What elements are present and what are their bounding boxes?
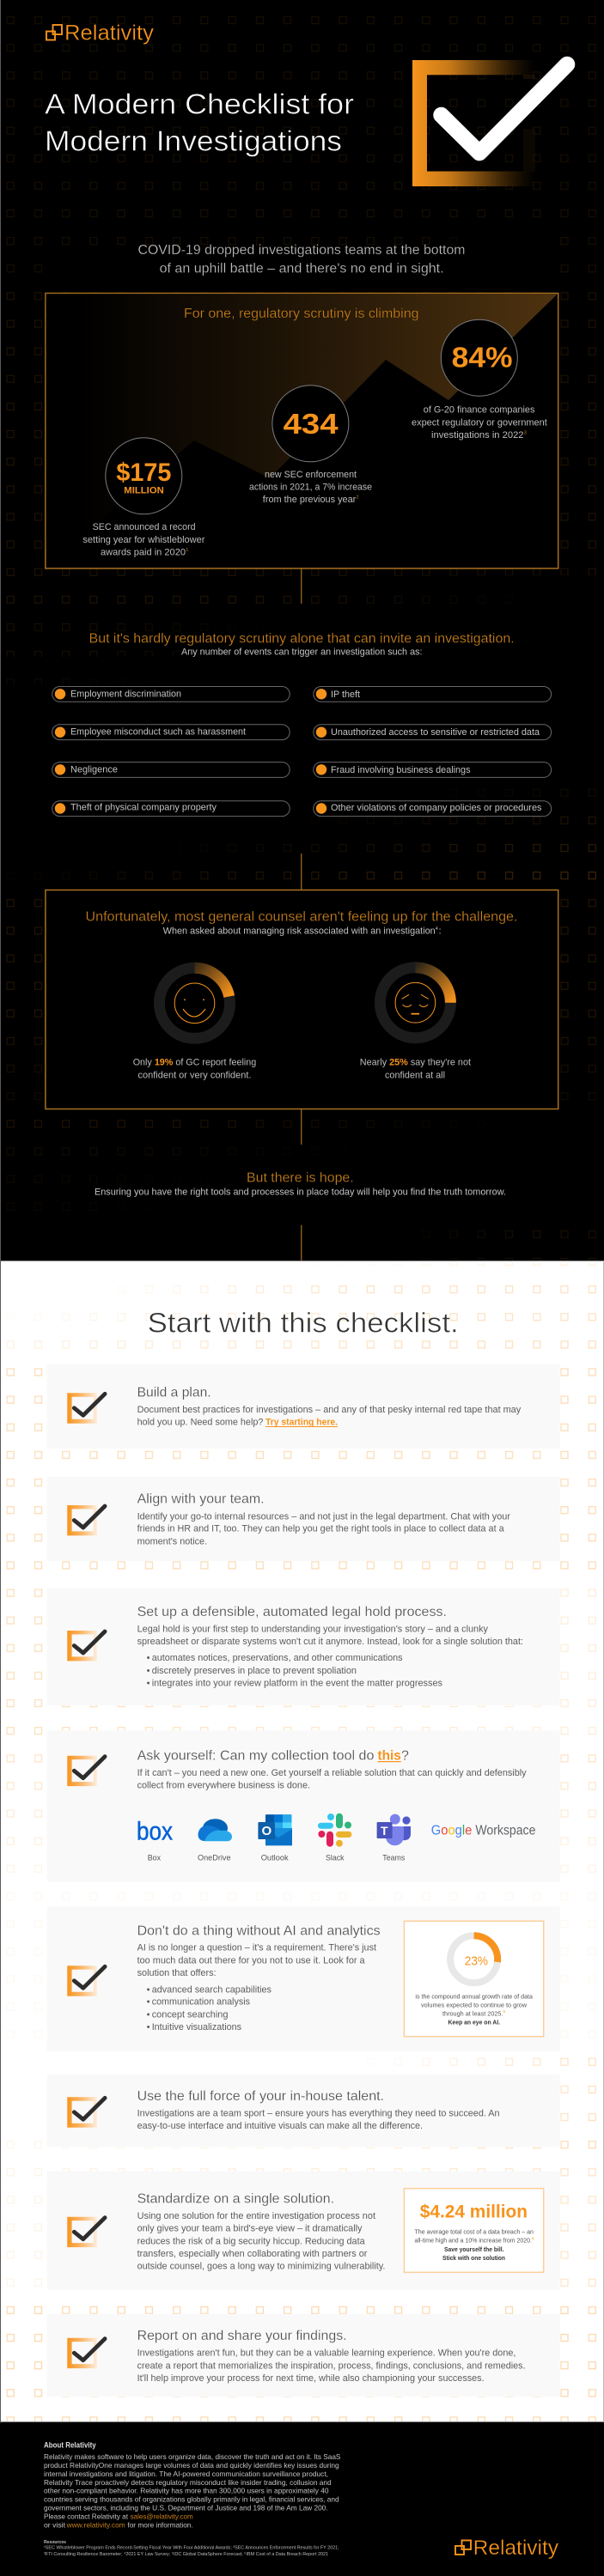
bullet list: •	[147, 1997, 150, 2008]
pill: fraud	[314, 762, 552, 777]
card: single solution	[47, 2172, 560, 2290]
intro text: of an uphill battle – and there's no end in sight.	[160, 261, 444, 276]
text: only 19 percent: Only 19% of GC report feeling	[133, 1058, 256, 1068]
card: AI and analytics: AI is no longer a question – it's a requirement. There's just	[137, 1943, 377, 1953]
card: report and share: create a report that memorializes the inspiration, process, findings, conclusions, and remedies.	[137, 2360, 526, 2371]
icon: large checkbox with check mark	[412, 60, 567, 186]
callout: 23 percent growth: through at least 2025.	[442, 2011, 503, 2017]
text: only 19 percent	[133, 1058, 256, 1080]
heading: general counsel	[86, 909, 517, 936]
stat: 175 million: $175	[116, 459, 171, 487]
bullet list: communication analysis	[152, 1997, 250, 2008]
footer: resources: Resources	[44, 2540, 66, 2545]
footer: resources: ³FTI Consulting Resilience Barometer; ⁴2021 EY Law Survey; ⁵IDC Global DataSphere Forecast; ⁶IBM Cost of a Data Breach Report 2021	[44, 2552, 328, 2557]
card: build a plan	[47, 1364, 560, 1449]
logo: Relativity footer: Relativity	[473, 2537, 558, 2560]
stat: 84 percent: of G-20 finance companies	[424, 405, 535, 416]
icon: check	[67, 1631, 105, 1661]
chart: 19 percent donut with smiling face	[160, 968, 230, 1038]
card: collection tool: If it can't – you need a new one. Get yourself a reliable solution that can quickly and defensibly	[137, 1768, 527, 1778]
card: align with your team: moment's notice.	[137, 1536, 207, 1546]
stat: 175 million: awards paid in 2020	[101, 548, 186, 558]
card: align with your team: friends in HR and IT, too. They can help you get the right tools in place to collect data at a	[137, 1524, 504, 1534]
pill: employee misconduct	[52, 725, 290, 740]
pill: employee misconduct: Employee misconduct such as harassment	[70, 727, 246, 738]
pill: IP theft	[314, 687, 552, 702]
card: align with your team: Identify your go-to internal resources – and not just in the legal department. Chat with your	[137, 1511, 510, 1522]
stat: 434: new SEC enforcement	[265, 470, 357, 480]
card: AI and analytics: too much data out there for you not to use it. Look for a	[137, 1955, 365, 1965]
footer background	[0, 2423, 604, 2576]
pill: fraud: Fraud involving business dealings	[331, 765, 471, 775]
heading: hope: Ensuring you have the right tools and processes in place today will help you find the truth tomorrow.	[95, 1188, 506, 1198]
logo: Outlook	[258, 1814, 292, 1862]
card: report and share: Investigations aren't fun, but they can be a valuable learning experience. When you're done,	[137, 2348, 516, 2359]
connector line	[301, 568, 302, 604]
card: AI and analytics	[47, 1906, 560, 2051]
footer: about Relativity: government sectors, including the U.S. Department of Justice and 198 of the Am Law 200.	[44, 2503, 328, 2512]
card: AI and analytics: Don't do a thing without AI and analytics	[137, 1923, 381, 1938]
footer: about Relativity: Relativity Trace proactively detects regulatory misconduct like insider trading, collusion and	[44, 2478, 332, 2487]
footer: about Relativity: countries serving thousands of organizations globally primarily in legal, financial services, and	[44, 2495, 339, 2504]
footer: about Relativity: sales@relativity.com	[131, 2512, 193, 2520]
bullet list: •	[147, 1666, 150, 1676]
icon: check	[67, 1393, 105, 1424]
bullet list	[147, 1984, 271, 2032]
footer: resources: ¹SEC Whistleblower Program Ends Record-Setting Fiscal Year With Four Additional Awards; ²SEC Announces Enforcement Results for FY 2021;	[44, 2546, 339, 2551]
chart: 23 percent donut: 23%	[465, 1953, 488, 1968]
pill: employment discrimination: Employment discrimination	[70, 690, 181, 700]
text: only 19 percent: confident or very confident.	[137, 1070, 251, 1080]
heading: general counsel: Unfortunately, most general counsel aren't feeling up for the challenge.	[86, 909, 517, 924]
callout: 4.24 million: 6	[532, 2236, 534, 2240]
heading: triggers: Any number of events can trigger an investigation such as:	[181, 647, 423, 657]
pill: negligence: Negligence	[70, 764, 118, 775]
intro text: COVID-19 dropped investigations teams at the bottom	[137, 243, 466, 258]
icon: check	[67, 1965, 105, 1996]
title: A Modern Checklist for	[45, 89, 354, 121]
pill: unauthorized access	[314, 725, 552, 740]
pill: theft of physical property	[52, 801, 290, 817]
card: collection tool: Ask yourself: Can my collection tool do	[137, 1748, 374, 1763]
icon: check	[67, 2097, 105, 2128]
icon: check	[67, 1756, 105, 1786]
logo: Box	[137, 1817, 173, 1862]
bullet list: •	[147, 2009, 150, 2020]
callout: 23 percent growth: is the compound annual growth rate of data	[415, 1994, 533, 2000]
text: nearly 25 percent: Nearly 25% say they're not	[360, 1058, 471, 1068]
logo: Slack: Slack	[326, 1854, 345, 1862]
pill: employment discrimination	[52, 687, 290, 702]
callout: 23 percent growth: 5	[503, 2009, 505, 2014]
pill: negligence	[52, 762, 290, 777]
panel: regulatory scrutiny climbing	[46, 294, 558, 568]
bullet list: •	[147, 2022, 150, 2032]
pill: IP theft: IP theft	[331, 690, 360, 700]
callout: 4.24 million: The average total cost of a data breach – an	[414, 2228, 534, 2236]
logo: Google Workspace	[431, 1824, 535, 1838]
card: single solution: only gives your team a bird's-eye view – it dramatically	[137, 2224, 363, 2234]
bullet list: •	[147, 1984, 150, 1995]
heading: hope: But there is hope.	[247, 1171, 354, 1186]
heading: general counsel: When asked about managing risk associated with an investigation	[163, 926, 436, 936]
logo: OneDrive: OneDrive	[198, 1854, 231, 1862]
card: legal hold process	[47, 1588, 560, 1705]
connector line	[301, 1109, 302, 1145]
bullet list: •	[147, 1653, 150, 1663]
text: nearly 25 percent	[360, 1058, 471, 1080]
bullet list: automates notices, preservations, and other communications	[152, 1653, 403, 1663]
callout: 4.24 million: Save yourself the bill.	[444, 2245, 503, 2253]
card: single solution: outside counsel, goes a long way to minimizing vulnerability.	[137, 2262, 385, 2272]
footer: about Relativity: www.relativity.com	[66, 2520, 125, 2529]
icon: check	[67, 2338, 105, 2368]
chart: 23 percent donut	[450, 1935, 497, 1983]
footer: about Relativity: for more information.	[127, 2520, 193, 2529]
footer: about Relativity: or visit	[44, 2520, 66, 2529]
stat: 175 million: MILLION	[124, 485, 164, 495]
heading: regulatory scrutiny: For one, regulatory scrutiny is climbing	[184, 307, 419, 321]
stat: 434: 2	[356, 495, 359, 500]
card: build a plan: Document best practices for investigations – and any of that pesky internal red tape that may	[137, 1405, 522, 1415]
logo: Google Workspace: Workspace	[475, 1824, 535, 1838]
footer: about Relativity: product RelativityOne manages large volumes of data and quickly identifies key issues during	[44, 2461, 339, 2470]
stat: 84 percent: investigations in 2022	[431, 430, 524, 440]
bullet list: advanced search capabilities	[152, 1984, 271, 1995]
card: in-house talent: Investigations are a team sport – ensure yours has everything they need to succeed. An	[137, 2109, 500, 2119]
stat: 84 percent	[412, 319, 547, 440]
bullet list: concept searching	[152, 2009, 229, 2020]
footer: about Relativity: Relativity makes software to help users organize data, discover the truth and act on it. Its SaaS	[44, 2452, 341, 2461]
card: build a plan: hold you up. Need some help?	[137, 1418, 263, 1428]
heading: general counsel: :	[438, 926, 442, 936]
stat: 175 million	[82, 438, 205, 558]
footer: about Relativity: internal investigations and litigation. The AI-powered communication surveillance product,	[44, 2470, 328, 2478]
chart: 25 percent donut with sad face	[380, 968, 450, 1038]
card: collection tool	[47, 1730, 560, 1882]
stat: 84 percent: 3	[524, 431, 527, 436]
heading: triggers	[89, 631, 515, 657]
link: this: this	[378, 1748, 401, 1763]
stat: 434: 434	[284, 408, 339, 440]
stat: 84 percent: 84%	[452, 342, 513, 374]
heading: triggers: But it's hardly regulatory scrutiny alone that can invite an investigation.	[89, 631, 515, 646]
logo: Google Workspace: Google	[431, 1824, 472, 1838]
stat: 175 million: SEC announced a record	[93, 522, 196, 532]
footer: about Relativity	[44, 2441, 341, 2529]
icon: check	[67, 2217, 105, 2247]
callout: 4.24 million: $4.24 million	[420, 2202, 528, 2222]
footer: about Relativity: About Relativity	[44, 2441, 96, 2450]
title	[45, 89, 354, 158]
logo: Relativity header: Relativity	[64, 21, 155, 46]
bullet list: Intuitive visualizations	[152, 2022, 241, 2032]
stat: 434: from the previous year	[263, 495, 357, 505]
stat: 434: actions in 2021, a 7% increase	[249, 483, 372, 493]
pill: other violations: Other violations of company policies or procedures	[331, 803, 542, 813]
callout: 23 percent growth	[404, 1921, 544, 2037]
pill: theft of physical property: Theft of physical company property	[70, 802, 217, 812]
text: nearly 25 percent: confident at all	[385, 1070, 445, 1080]
heading: start with this checklist: Start with this checklist.	[148, 1308, 459, 1339]
card: collection tool: ?	[401, 1748, 409, 1763]
stat: 175 million: 1	[186, 548, 188, 553]
card: AI and analytics: solution that offers:	[137, 1968, 217, 1978]
card: align with your team: Align with your team.	[137, 1492, 265, 1507]
link: try starting here: Try starting here.	[265, 1418, 338, 1428]
logo: Outlook: Outlook	[261, 1854, 289, 1862]
callout: 4.24 million: Stick with one solution	[442, 2254, 505, 2262]
card: build a plan: Build a plan.	[137, 1386, 211, 1400]
logo: OneDrive	[198, 1819, 232, 1862]
bullet list	[147, 1653, 442, 1689]
card: collection tool: collect from everywhere business is done.	[137, 1781, 310, 1791]
logo: Outlook: O	[261, 1824, 271, 1838]
card: legal hold process: Legal hold is your first step to understanding your investigation's story – and a clunky	[137, 1624, 488, 1634]
bullet list: discretely preserves in place to prevent spoliation	[152, 1666, 357, 1676]
logo: Box: Box	[148, 1854, 161, 1862]
list: investigation triggers	[52, 687, 552, 817]
logo: Slack	[318, 1814, 351, 1862]
card: in-house talent: Use the full force of your in-house talent.	[137, 2089, 384, 2104]
card: single solution: Standardize on a single solution.	[137, 2191, 334, 2206]
card: report and share	[47, 2314, 560, 2397]
card: single solution: reduces the risk of a big security hiccup. Reducing data	[137, 2236, 365, 2246]
intro text	[137, 243, 466, 276]
callout: 23 percent growth: volumes expected to continue to grow	[421, 2002, 528, 2008]
logo: Teams	[377, 1814, 411, 1862]
logo: Teams: Teams	[382, 1854, 406, 1862]
card: legal hold process: spreadsheet or disparate systems won't cut it anymore. Instead, look for a single solution that:	[137, 1637, 523, 1647]
card: legal hold process: Set up a defensible, automated legal hold process.	[137, 1605, 447, 1619]
title: Modern Investigations	[45, 126, 342, 158]
footer: about Relativity: other non-compliant behavior. Relativity has more than 300,000 users in approximately 40	[44, 2487, 329, 2495]
logo: Teams: T	[381, 1824, 388, 1838]
stat: 175 million: setting year for whistleblower	[82, 535, 205, 545]
callout: 23 percent growth: Keep an eye on AI.	[448, 2020, 500, 2026]
chart: rising mountain area	[46, 294, 558, 550]
pill: unauthorized access: Unauthorized access to sensitive or restricted data	[331, 727, 540, 738]
connector line	[301, 1225, 302, 1261]
stat: 84 percent: expect regulatory or government	[412, 417, 547, 428]
card: report and share: It'll help improve your process for next time, while also championing your successes.	[137, 2373, 485, 2384]
footer: resources	[44, 2540, 339, 2557]
card: single solution: Using one solution for the entire investigation process not	[137, 2211, 376, 2221]
pill: other violations	[314, 801, 552, 817]
card: align with your team	[47, 1477, 560, 1561]
heading: hope	[95, 1171, 506, 1198]
stat: 434	[249, 386, 372, 505]
heading: general counsel: 4	[436, 927, 438, 932]
card: in-house talent: easy-to-use interface and intuitive visuals can make all the difference.	[137, 2121, 423, 2131]
logo: Box: box	[137, 1817, 173, 1846]
panel: general counsel confidence	[46, 890, 558, 1109]
bullet list: integrates into your review platform in the event the matter progresses	[152, 1679, 442, 1689]
icon: check	[67, 1505, 105, 1535]
callout: 4.24 million	[404, 2189, 544, 2272]
card: report and share: Report on and share your findings.	[137, 2329, 347, 2343]
card: in-house talent	[47, 2075, 560, 2147]
bullet list: •	[147, 1679, 150, 1689]
card: single solution: transfers, especially when collaborating with partners or	[137, 2249, 368, 2259]
callout: 4.24 million: all-time high and a 10% increase from 2020.	[414, 2237, 532, 2245]
footer: about Relativity: Please contact Relativity at	[44, 2512, 129, 2520]
connector line	[301, 854, 302, 890]
